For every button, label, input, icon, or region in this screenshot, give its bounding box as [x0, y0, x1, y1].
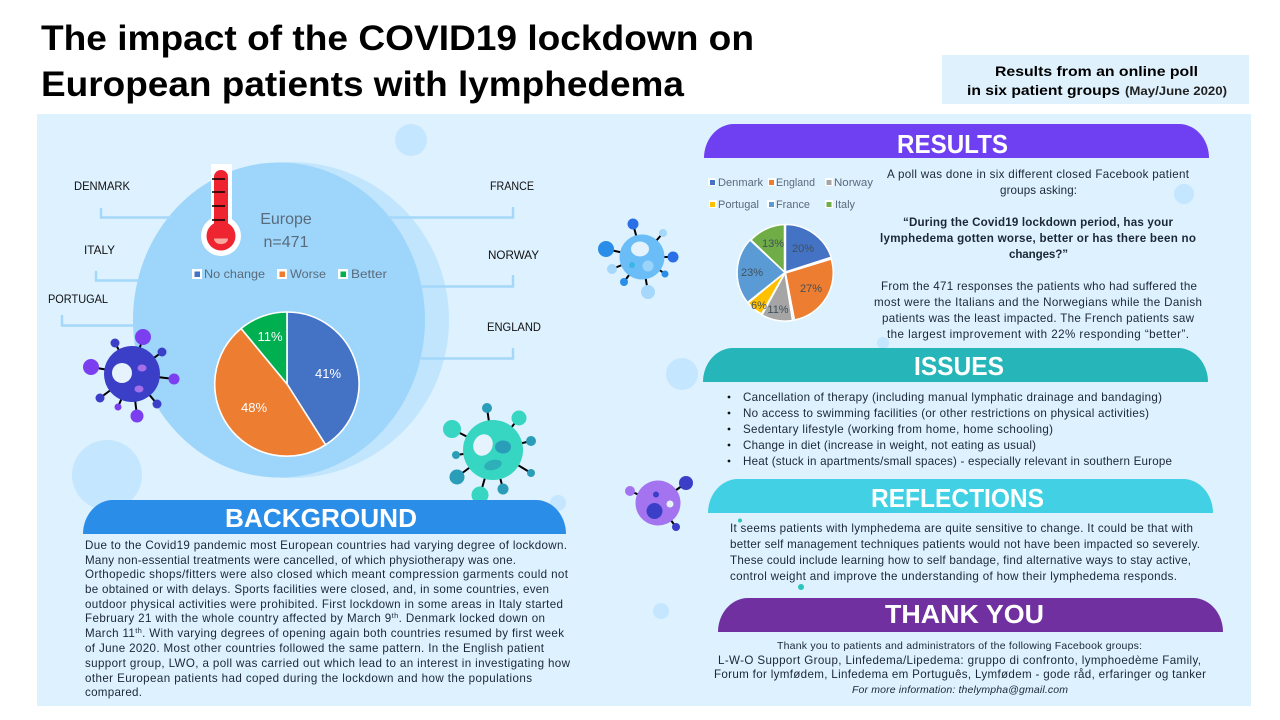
results text: most were the Italians and the Norwegians while the Danish	[874, 296, 1202, 309]
reflections text: better self management techniques patients would not have been impacted so severely.	[730, 538, 1200, 551]
country labels	[48, 179, 541, 334]
reflections header: REFLECTIONS	[871, 483, 1044, 513]
title: European patients with lymphedema	[41, 65, 685, 104]
Europe pie legend: Better	[351, 267, 387, 281]
thank you text	[714, 640, 1206, 696]
country pie legend: France	[776, 199, 810, 211]
country labels: ITALY	[84, 243, 115, 257]
background header: BACKGROUND	[225, 503, 417, 533]
title: The impact of the COVID19 lockdown on	[41, 19, 754, 58]
background text: March 11	[85, 627, 135, 640]
subtitle box	[942, 55, 1249, 104]
background text: . Denmark locked down on	[399, 612, 545, 625]
results text: lymphedema gotten worse, better or has there been no	[880, 232, 1196, 245]
issues list	[728, 391, 1172, 468]
background text: outdoor physical activities were prohibited. First lockdown in some areas in Italy started	[85, 598, 563, 611]
issues list: Change in diet (increase in weight, not eating as usual)	[743, 439, 1036, 452]
icon: dark blue virus	[83, 329, 180, 422]
background text: th	[392, 611, 398, 620]
Europe heading	[260, 211, 312, 251]
background text: Due to the Covid19 pandemic most European countries had varying degree of lockdown.	[85, 539, 567, 552]
results text: the largest improvement with 22% responding “better”.	[887, 328, 1189, 341]
issues header	[703, 348, 1208, 382]
issues list: Cancellation of therapy (including manual lymphatic drainage and bandaging)	[743, 391, 1162, 404]
thank you text: L-W-O Support Group, Linfedema/Lipedema: gruppo di confronto, lymphoedème Family,	[718, 654, 1201, 667]
background header	[83, 500, 566, 534]
country pie legend	[708, 177, 874, 211]
background text: support group, LWO, a poll was carried out which lead to an interest in investigating how	[85, 657, 571, 670]
results text: patients was the least impacted. The French patients saw	[882, 312, 1195, 325]
Europe pie legend: No change	[204, 267, 265, 281]
Europe globe circle	[133, 162, 449, 478]
issues list: Sedentary lifestyle (working from home, home schooling)	[743, 423, 1053, 436]
reflections text	[730, 522, 1200, 583]
reflections text: It seems patients with lymphedema are quite sensitive to change. It could be that with	[730, 522, 1193, 535]
issues list: Heat (stuck in apartments/small spaces) - especially relevant in southern Europe	[743, 455, 1172, 468]
subtitle box: Results from an online poll	[995, 63, 1198, 79]
country pie legend: Norway	[834, 177, 874, 189]
background text: be obtained or with delays. Sports facilities were closed, and, in some countries, even	[85, 583, 549, 596]
main panel background	[37, 114, 1251, 706]
background text: Many non-essential treatments were cancelled, of which physiotherapy was one.	[85, 554, 516, 567]
thank you header: THANK YOU	[885, 599, 1044, 629]
pie chart: Europe: 48%	[241, 400, 267, 415]
reflections text: control weight and improve the understanding of how their lymphedema responds.	[730, 570, 1177, 583]
country labels: ENGLAND	[487, 320, 541, 334]
pie chart: poll responses by country	[737, 224, 833, 321]
icon: green virus	[443, 403, 536, 504]
pie chart: poll responses by country: 6%	[751, 300, 767, 312]
background text: of June 2020. Most other countries followed the same pattern. In the English patient	[85, 642, 545, 655]
results header: RESULTS	[897, 129, 1008, 159]
country labels: PORTUGAL	[48, 292, 108, 306]
reflections text: These could include learning how to self bandage, find alternative ways to stay active,	[730, 554, 1191, 567]
country labels: DENMARK	[74, 179, 130, 193]
country labels: NORWAY	[488, 248, 539, 262]
issues list: No access to swimming facilities (or other restrictions on physical activities)	[743, 407, 1149, 420]
background text: February 21 with the whole country affected by March 9	[85, 612, 391, 625]
Europe heading: Europe	[260, 211, 312, 228]
pie chart: poll responses by country: 13%	[762, 238, 784, 250]
Europe pie legend: Worse	[290, 267, 326, 281]
decorative teal dots	[738, 518, 804, 590]
background text: other European patients had coped during the lockdown and how the populations	[85, 672, 532, 685]
thank you text: For more information: thelympha@gmail.com	[852, 684, 1068, 696]
pie chart: poll responses by country: 20%	[792, 243, 814, 255]
results text	[874, 168, 1202, 341]
issues header: ISSUES	[914, 351, 1004, 381]
thank you header	[718, 598, 1223, 632]
results text: groups asking:	[1000, 184, 1077, 197]
results text: changes?”	[1009, 248, 1068, 261]
results text: From the 471 responses the patients who had suffered the	[881, 280, 1197, 293]
country pie legend: Portugal	[718, 199, 759, 211]
thank you text: Thank you to patients and administrators of the following Facebook groups:	[777, 640, 1142, 652]
icon: purple virus	[625, 476, 693, 531]
country connector lines	[62, 207, 513, 358]
results text: A poll was done in six different closed Facebook patient	[887, 168, 1190, 181]
pie chart: Europe: 11%	[257, 329, 283, 344]
background text: compared.	[85, 686, 142, 699]
country pie legend: Denmark	[718, 177, 764, 189]
icon: light blue virus	[598, 218, 678, 299]
subtitle box: (May/June 2020)	[1125, 84, 1227, 98]
pie chart: poll responses by country: 27%	[800, 283, 822, 295]
results header	[704, 124, 1209, 159]
background text: th	[135, 626, 142, 635]
country pie legend: England	[776, 177, 815, 189]
background text	[85, 539, 571, 699]
background text: . With varying degrees of opening again both countries resumed by first week	[142, 627, 564, 640]
reflections header	[708, 479, 1213, 513]
background text: Orthopedic shops/fitters were also closed which meant compression garments could not	[85, 568, 569, 581]
country pie legend: Italy	[835, 199, 856, 211]
subtitle box: in six patient groups	[967, 82, 1120, 98]
pie chart: Europe	[215, 312, 359, 456]
decorative bubbles	[72, 124, 1194, 619]
Europe heading: n=471	[264, 234, 309, 251]
icon: thermometer	[201, 164, 241, 256]
results text: “During the Covid19 lockdown period, has your	[903, 216, 1173, 229]
thank you text: Forum for lymfødem, Linfedema em Português, Lymfødem - gode råd, erfaringer og tanker	[714, 668, 1206, 681]
country labels: FRANCE	[490, 179, 534, 193]
Europe pie legend	[192, 267, 387, 281]
pie chart: poll responses by country: 23%	[741, 267, 763, 279]
pie chart: Europe: 41%	[315, 366, 341, 381]
title	[41, 19, 754, 104]
pie chart: poll responses by country: 11%	[767, 304, 789, 316]
